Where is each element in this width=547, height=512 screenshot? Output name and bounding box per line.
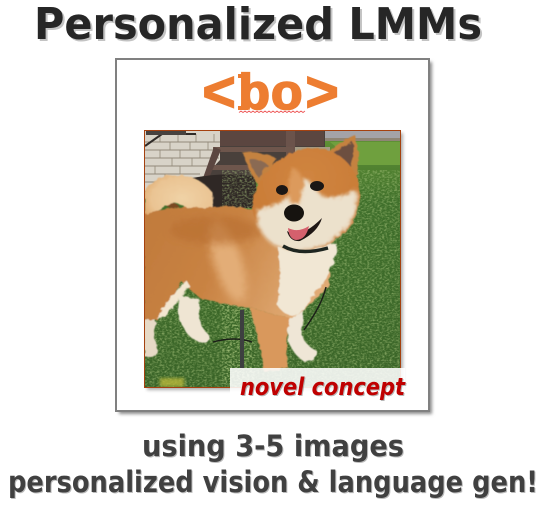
nose [284,204,304,222]
grass texture [222,170,400,387]
far back leg [178,295,210,343]
title: Personalized LMMs [34,0,482,50]
eyes [276,185,288,195]
grass [145,141,400,387]
leash [213,287,326,342]
tail [145,175,213,222]
chest [277,242,338,316]
logo: bo tag: bo [238,68,303,125]
body [144,206,330,320]
title: Personalized LMMs [36,1,484,52]
label: novel concept [230,368,407,405]
photo: shiba inu dog [144,130,400,388]
ears [243,135,359,190]
label: novel concept: novel concept [240,373,406,401]
caption [8,429,539,500]
logo: bo tag: < [202,65,236,129]
front orange leg [250,308,290,372]
logo: bo tag: > [305,65,339,129]
caption: using 3-5 images [142,429,404,463]
cheeks [257,178,357,251]
head [252,148,360,251]
collar [283,246,328,252]
rear leg [144,315,157,357]
mouth [287,218,322,241]
panel: framed card [116,59,432,414]
white front leg [285,305,317,362]
brick wall [145,131,220,191]
dog [144,135,360,372]
logo: bo tag [202,65,339,129]
deck stairs [203,131,330,178]
label: novel concept: novel concept [241,374,407,402]
caption: using 3-5 images [143,430,405,464]
mulch [195,174,258,208]
